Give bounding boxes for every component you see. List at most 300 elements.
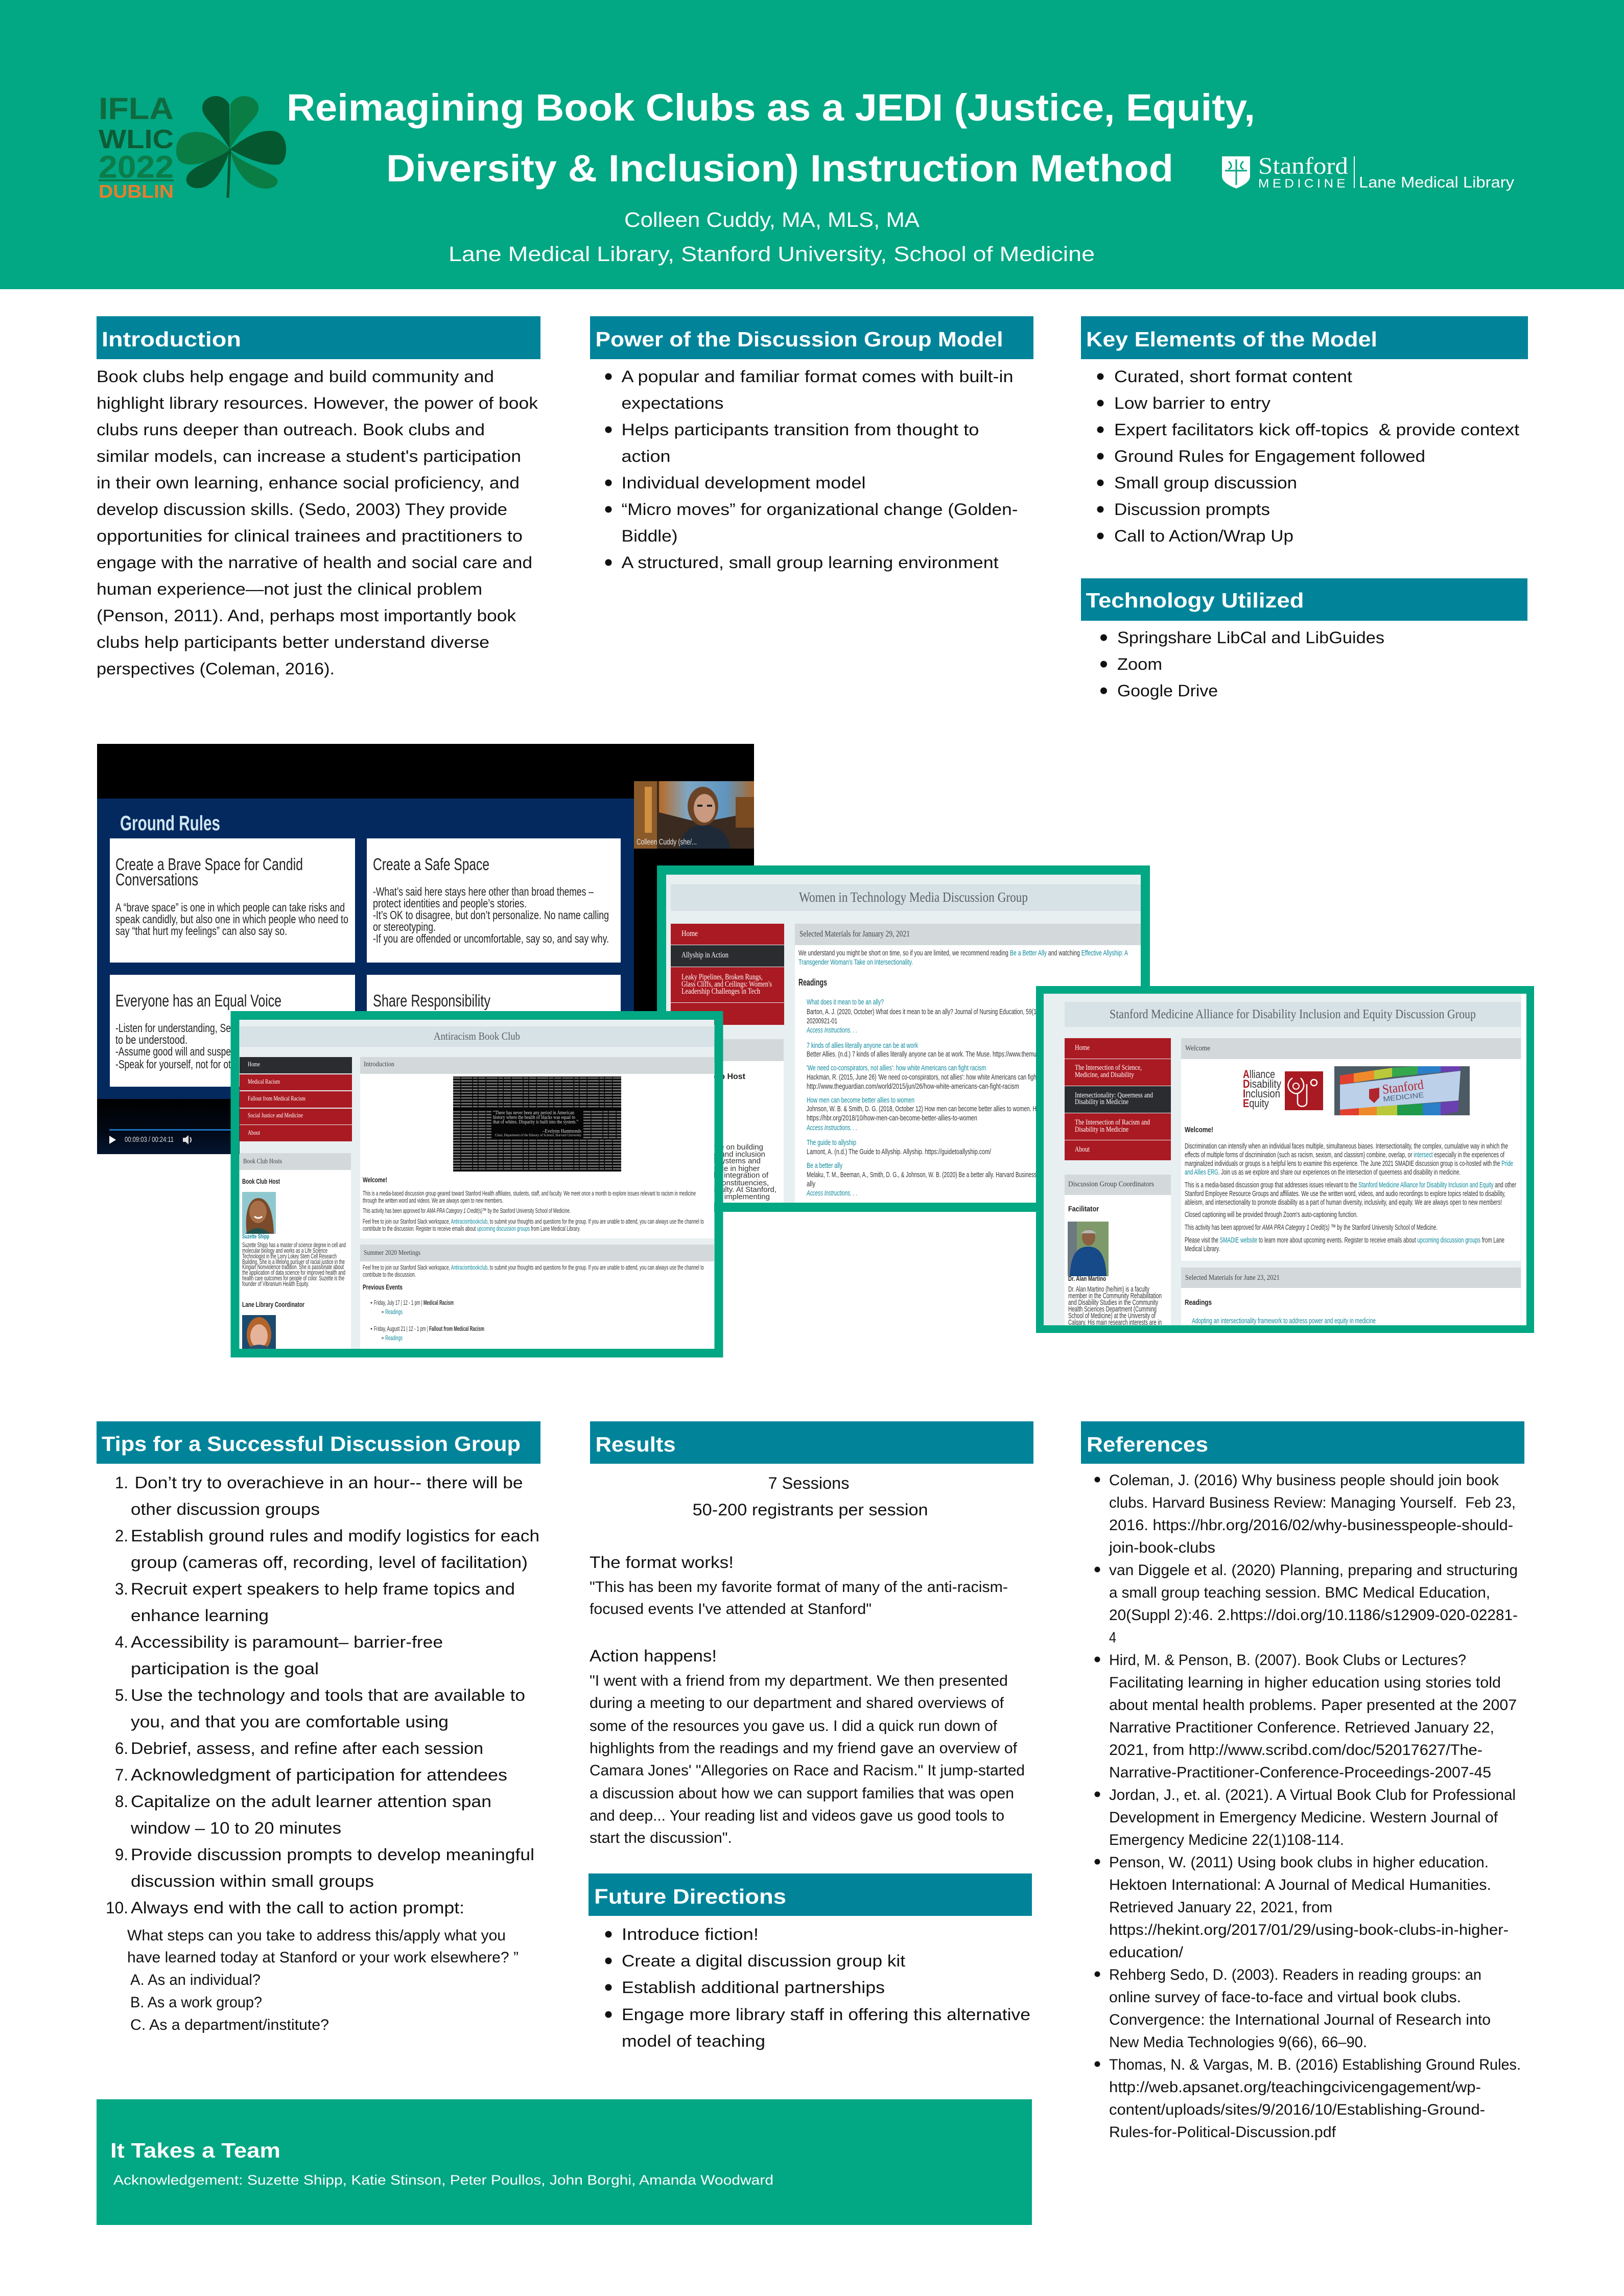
logo: IFLA WLIC 2022 Dublin: 2022: [99, 150, 174, 185]
heading: power of the discussion group model: Power of the Discussion Group Model: [596, 327, 1003, 351]
sidebar: discussion group coordinators: Dr. Alan Martino (he/him) is a faculty: [1068, 1285, 1149, 1294]
main content: introduction: Feel free to join our Stanford Slack workspace, Antiracismbookclub, to submit your thoughts and questions for the group. If you are unable to attend, you can always use the channel to: [363, 1217, 704, 1225]
logo: alliance disability inclusion equity: Disability: [1243, 1077, 1281, 1090]
heading: references: References: [1087, 1433, 1208, 1456]
sidebar: discussion group coordinators: Facilitator: [1068, 1205, 1099, 1213]
title: Reimagining Book Clubs as a JEDI (Justice, Equity,: [287, 86, 1255, 129]
main content: summer 2020 meetings: Summer 2020 Meetings: [364, 1249, 420, 1257]
card: share responsibility: Share Responsibility: [373, 991, 490, 1010]
panel: introduction: [97, 316, 540, 678]
main content: selected materials: We understand you might be short on time, so if you are limited, we recommend reading Be a Better Ally and watching Effective Allyship: A: [798, 949, 1128, 957]
list: references: Convergence: the International Journal of Research into: [1109, 2011, 1491, 2028]
list: future directions: Create a digital discussion group kit: [622, 1952, 905, 1970]
list: technology bullets: Google Drive: [1117, 682, 1218, 700]
list: references: about mental health problems. Paper presented at the 2007: [1109, 1697, 1517, 1714]
photo: speaker webcam: [634, 781, 754, 849]
panel: future directions: [589, 1873, 1032, 2050]
list: power bullets: Individual development model: [621, 474, 865, 492]
numbered list: tips: Acknowledgment of participation for attendees: [131, 1766, 507, 1784]
list: references: van Diggele et al. (2020) Planning, preparing and structuring: [1109, 1562, 1518, 1579]
main content: summer 2020 meetings: Previous Events: [363, 1283, 403, 1291]
main content: welcome: and Allies ERG. Join us as we explore and share our experiences on the intersection of queerness and disability in medicine.: [1185, 1168, 1461, 1177]
main content: selected materials: ally: [807, 1180, 815, 1188]
sidebar hosts: diversity, and inclusion: [689, 1150, 765, 1159]
list: key elements bullets: Expert facilitators kick off-topics & provide context: [1114, 420, 1519, 439]
panel: tips for a successful discussion group: [97, 1421, 540, 2033]
photo: stanford medicine pride banner: Stanford: [1381, 1077, 1424, 1097]
main content: welcome: This is a media-based discussion group that addresses issues relevant to the Stanford Medicine Alliance for Disability Inclusion and Equity and other: [1185, 1181, 1516, 1189]
numbered list: tips: 10.: [106, 1899, 128, 1917]
sidebar: discussion group coordinators: [1065, 1175, 1171, 1327]
main content: selected materials: Barton, A. J. (2020, October) What does it mean to be an ally? Journal of Nursing Education, 59(1: [807, 1008, 1037, 1016]
sidebar: discussion group coordinators: Discussion Group Coordinators: [1068, 1180, 1154, 1188]
sidebar: discussion group coordinators: School of Medicine) at the University of: [1068, 1311, 1156, 1320]
video controls: [109, 1129, 231, 1144]
list: future directions: Engage more library staff in offering this alternative: [622, 2005, 1030, 2024]
list: references: content/uploads/sites/9/2016/10/Establishing-Ground-: [1109, 2101, 1485, 2118]
card: brave space: Create a Brave Space for Candid: [115, 855, 303, 874]
card: equal voice: Everyone has an Equal Voice: [115, 991, 281, 1010]
title: Diversity & Inclusion) Instruction Method: [386, 147, 1173, 190]
sidebar navigation: About: [248, 1129, 260, 1136]
sidebar: book club hosts: Lane Library Coordinator: [242, 1300, 304, 1308]
list: references: http://web.apsanet.org/teachingcivicengagement/wp-: [1109, 2079, 1481, 2096]
main content: summer 2020 meetings: Readings: [385, 1308, 403, 1316]
list: references: Hektoen International: A Journal of Medical Humanities.: [1109, 1877, 1491, 1893]
quote: action happens: [590, 1647, 1025, 1846]
logo: Stanford Medicine Lane Medical Library: Lane Medical Library: [1359, 173, 1515, 191]
main content: selected materials: http://www.theguardian.com/world/2015/jun/26/how-white-americans-can-fight-racism: [807, 1082, 1019, 1091]
numbered list: tips: Accessibility is paramount– barrier-free: [131, 1633, 443, 1651]
main content: summer 2020 meetings: contribute to the discussion.: [363, 1271, 416, 1278]
list: references: 2016. https://hbr.org/2016/02/why-businesspeople-should-: [1109, 1517, 1513, 1534]
sidebar: book club hosts: molecular biology and works as a Life Science: [242, 1247, 327, 1254]
main content: selected materials: The guide to allyship: [807, 1138, 856, 1147]
quote: action happens: during a meeting to our department and shared overviews of: [590, 1695, 1004, 1712]
quote: action happens: highlights from the readings and my friend gave an overview of: [590, 1740, 1018, 1756]
list: references: a small group teaching session. BMC Medical Education,: [1109, 1584, 1490, 1601]
numbered list: tips: 9.: [115, 1845, 128, 1864]
page title: [1065, 1002, 1521, 1027]
list: key elements bullets: [1097, 367, 1519, 545]
sidebar: discussion group coordinators: Health Sciences Department (Cumming: [1068, 1305, 1157, 1314]
quote: the format works: The format works!: [590, 1553, 734, 1572]
authors: Lane Medical Library, Stanford University, School of Medicine: [449, 242, 1095, 266]
stat: sessions and registrants: 7 Sessions: [768, 1474, 849, 1492]
list: references: Coleman, J. (2016) Why business people should join book: [1109, 1472, 1499, 1489]
photo: Suzette Shipp: [242, 1192, 276, 1234]
text block: introduction body: clubs runs deeper than outreach. Book clubs and: [97, 420, 485, 439]
list: references: Narrative-Practitioner-Conference-Proceedings-2007-45: [1109, 1764, 1491, 1781]
card: brave space: [110, 838, 355, 963]
numbered list: tips: Don’t try to overachieve in an hour-- there will be: [135, 1473, 523, 1492]
numbered list: tips: 3.: [115, 1580, 128, 1598]
list: references: Hird, M. & Penson, B. (2007). Book Clubs or Lectures?: [1109, 1652, 1466, 1669]
main content: introduction: through the written word and videos. We are always open to new members.: [363, 1197, 503, 1204]
photo: stanford medicine pride banner: [1334, 1066, 1470, 1115]
quote: action happens: and deep... Your reading list and videos gave us good tools to: [590, 1808, 1004, 1824]
main content: selected materials: 7 kinds of allies literally anyone can be at work: [807, 1041, 918, 1050]
quote: action happens: start the discussion".: [590, 1830, 732, 1846]
card: brave space: A “brave space” is one in which people can take risks and: [115, 901, 345, 914]
main content: selected materials: Selected Materials for January 29, 2021: [799, 929, 910, 939]
sidebar hosts: with implementing: [708, 1192, 770, 1201]
logo: alliance disability inclusion equity: [1243, 1068, 1323, 1110]
text block: introduction body: (Penson, 2011). And, perhaps most importantly book: [97, 606, 516, 625]
sidebar navigation: Allyship in Action: [681, 951, 728, 959]
panel: power of the discussion group model: [590, 316, 1033, 572]
card: safe space: -If you are offended or uncomfortable, say so, and say why.: [373, 932, 609, 945]
heading: ground rules: Ground Rules: [120, 811, 220, 835]
list: references: Jordan, J., et. al. (2021). A Virtual Book Club for Professional: [1109, 1787, 1516, 1803]
stat: sessions and registrants: 50-200 registrants per session: [693, 1501, 928, 1519]
sidebar: discussion group coordinators: and Disability Studies in the Community: [1068, 1298, 1158, 1307]
sidebar: book club hosts: Building. She is a lifelong pursuer of racial justice in the: [242, 1258, 345, 1266]
main content: selected materials: 20200921-01: [807, 1017, 837, 1025]
text block: call to action prompt: [127, 1927, 519, 2033]
numbered list: tips: Always end with the call to action prompt:: [131, 1899, 464, 1917]
sidebar hosts: guidance on building: [693, 1143, 763, 1152]
main content: selected materials: 'We need co-conspirators, not allies': how white Americans can fight racism: [807, 1064, 986, 1072]
logo: Stanford Medicine Lane Medical Library: [1222, 153, 1515, 191]
heading: technology utilized: Technology Utilized: [1086, 589, 1304, 612]
sidebar: book club hosts: founder of Vibranium Health Equity.: [242, 1280, 309, 1287]
screenshot: stanford medicine alliance page: [1040, 990, 1531, 1329]
numbered list: tips: 7.: [115, 1766, 128, 1784]
list: references: 20(Suppl 2):46. 2.https://doi.org/10.1186/s12909-020-02281-: [1109, 1607, 1518, 1624]
page title: [240, 1026, 714, 1047]
list: technology bullets: [1100, 628, 1384, 700]
heading: tips: Tips for a Successful Discussion Group: [102, 1432, 521, 1456]
panel: technology utilized: [1081, 578, 1527, 700]
list: references: New Media Technologies 9(66), 66–90.: [1109, 2034, 1367, 2051]
list: key elements bullets: Call to Action/Wrap Up: [1114, 527, 1293, 545]
list: references: Narrative Practitioner Conference. Retrieved January 22,: [1109, 1719, 1494, 1736]
card: equal voice: to be understood.: [115, 1033, 187, 1046]
list: key elements bullets: Curated, short format content: [1114, 367, 1352, 386]
photo: Dr. Alan Martino: [1068, 1222, 1109, 1276]
heading: it takes a team: It Takes a Team: [110, 2139, 280, 2162]
numbered list: tips: 2.: [115, 1527, 128, 1545]
quote: the format works: "This has been my favorite format of many of the anti-racism-: [590, 1579, 1008, 1596]
sidebar: book club hosts: Suzette Shipp: [242, 1233, 269, 1240]
numbered list: tips: 8.: [115, 1792, 128, 1811]
title: [287, 86, 1255, 190]
list: references: clubs. Harvard Business Review: Managing Yourself. Feb 23,: [1109, 1494, 1516, 1511]
list: power bullets: “Micro moves” for organizational change (Golden-: [621, 500, 1018, 519]
screenshot: ground rules video: [97, 744, 754, 1154]
list: key elements bullets: Small group discussion: [1114, 474, 1297, 492]
numbered list: tips: [106, 1473, 539, 1917]
card: equal voice: -Listen for understanding, Se: [115, 1021, 231, 1035]
list: power bullets: Biddle): [621, 527, 677, 545]
text block: introduction body: engage with the narrative of health and social care and: [97, 553, 532, 572]
logo: Stanford Medicine Lane Medical Library: Stanford: [1258, 153, 1348, 179]
image: hammonds quote on names: that of whites. Disparity is built into the system.”: [493, 1119, 578, 1125]
sidebar navigation: [240, 1057, 352, 1141]
page title: Antiracism Book Club: [434, 1030, 520, 1042]
main content: selected materials june: Selected Materials for June 23, 2021: [1185, 1274, 1280, 1282]
sidebar: discussion group coordinators: member in the Community Rehabilitation: [1068, 1292, 1162, 1300]
sidebar navigation: Intersectionality: Queerness and: [1075, 1091, 1153, 1099]
sidebar hosts: Discussion Group Host: [654, 1072, 746, 1081]
sidebar: book club hosts: Book Club Hosts: [243, 1158, 282, 1165]
quote: the format works: focused events I've attended at Stanford": [590, 1601, 872, 1618]
main content: selected materials: Hackman, R. (2015, June 26) 'We need co-conspirators, not allies': how white Americans can figh: [807, 1073, 1037, 1082]
logo: alliance disability inclusion equity: Inclusion: [1243, 1087, 1280, 1100]
sidebar hosts: experience in higher: [691, 1164, 760, 1173]
main content: welcome: This activity has been approved for AMA PRA Category 1 Credit(s) ™ by the Stanford University School of Medicine.: [1185, 1223, 1438, 1232]
numbered list: tips: Capitalize on the adult learner attention span: [131, 1792, 491, 1811]
numbered list: tips: 4.: [115, 1633, 128, 1651]
logo: alliance disability inclusion equity: Alliance: [1243, 1068, 1275, 1081]
list: technology bullets: Zoom: [1117, 655, 1162, 673]
numbered list: tips: 6.: [115, 1739, 128, 1758]
list: references: Rehberg Sedo, D. (2003). Readers in reading groups: an: [1109, 1966, 1481, 1983]
card: equal voice: -Speak for yourself, not for ot: [115, 1058, 231, 1071]
logo: IFLA WLIC 2022 Dublin: [99, 91, 174, 202]
list: future directions: [605, 1925, 1030, 2050]
text block: introduction body: highlight library resources. However, the power of book: [97, 394, 538, 412]
image: hammonds quote on names: –Evelynn Hammonds: [542, 1129, 581, 1134]
image: hammonds quote on names: Chair, Department of the History of Science, Harvard University: [495, 1133, 581, 1137]
list: key elements bullets: Discussion prompts: [1114, 500, 1270, 519]
text block: introduction body: clubs help participants better understand diverse: [97, 633, 489, 651]
panel: it takes a team: [97, 2099, 1032, 2225]
main content: selected materials june: [1181, 1268, 1521, 1326]
heading: key elements: Key Elements of the Model: [1086, 327, 1377, 351]
list: references: Emergency Medicine 22(1)108-114.: [1109, 1832, 1344, 1848]
sidebar navigation: Social Justice and Medicine: [248, 1111, 303, 1119]
text block: call to action prompt: B. As a work group?: [130, 1994, 262, 2011]
sidebar: book club hosts: the application of data science for improved health and: [242, 1269, 345, 1276]
sidebar: book club hosts: health care outcomes for people of color. Suzette is the: [242, 1274, 344, 1282]
list: power bullets: expectations: [621, 394, 723, 412]
main content: selected materials: [795, 924, 1141, 1204]
text block: introduction body: similar models, can increase a student's participation: [97, 447, 521, 465]
main content: summer 2020 meetings: Friday, July 17 | 12 - 1 pm | Medical Racism: [374, 1299, 454, 1306]
authors: Colleen Cuddy, MA, MLS, MA: [624, 208, 920, 231]
numbered list: tips: Establish ground rules and modify logistics for each: [131, 1527, 539, 1545]
list: future directions: Establish additional partnerships: [622, 1978, 885, 1997]
main content: introduction: [360, 1057, 714, 1238]
heading: introduction: Introduction: [102, 327, 241, 351]
numbered list: tips: other discussion groups: [131, 1500, 320, 1518]
list: references: education/: [1109, 1944, 1184, 1961]
text block: call to action prompt: have learned today at Stanford or your work elsewhere? ”: [127, 1949, 519, 1966]
numbered list: tips: window – 10 to 20 minutes: [130, 1819, 341, 1837]
text block: introduction body: Book clubs help engage and build community and: [97, 367, 494, 386]
list: future directions: Introduce fiction!: [622, 1925, 759, 1943]
quote: action happens: a discussion about how we can support families that was open: [590, 1785, 1014, 1802]
main content: selected materials: Readings: [798, 977, 827, 988]
logo: IFLA WLIC 2022 Dublin: DUBLIN: [99, 181, 174, 202]
numbered list: tips: 5.: [115, 1686, 128, 1704]
main content: welcome: Closed captioning will be provided through Zoom's auto-captioning function.: [1185, 1210, 1358, 1219]
card: brave space: speak candidly, but also one in which people who need to: [115, 912, 348, 926]
list: references: Development in Emergency Medicine. Western Journal of: [1109, 1809, 1498, 1826]
list: future directions: model of teaching: [622, 2032, 765, 2050]
photo: stanford medicine pride banner: MEDICINE: [1383, 1091, 1424, 1103]
photo: speaker webcam: Colleen Cuddy (she/...: [637, 838, 697, 847]
image: hammonds quote on names: [453, 1076, 621, 1172]
sidebar: book club hosts: Book Club Host: [242, 1177, 280, 1185]
main content: introduction: Introduction: [364, 1061, 394, 1068]
logo: IFLA WLIC 2022 Dublin: IFLA: [99, 91, 174, 126]
main content: introduction: contribute to the discussion. Register to receive emails about upcoming discussion groups from Lane Medical Library.: [363, 1225, 580, 1232]
list: power bullets: A structured, small group learning environment: [621, 553, 998, 572]
quote: action happens: "I went with a friend from my department. We then presented: [590, 1673, 1008, 1689]
main content: welcome: [1181, 1038, 1521, 1261]
page title: Women in Technology Media Discussion Group: [799, 889, 1028, 905]
list: power bullets: A popular and familiar format comes with built-in: [621, 367, 1014, 386]
card: safe space: -What’s said here stays here other than broad themes –: [373, 885, 594, 898]
main content: welcome: Welcome!: [1185, 1126, 1213, 1134]
sidebar navigation: The Intersection of Racism and: [1075, 1118, 1150, 1127]
list: references: Facilitating learning in higher education using stories told: [1109, 1674, 1501, 1691]
numbered list: tips: Recruit expert speakers to help frame topics and: [131, 1580, 515, 1598]
list: power bullets: action: [621, 447, 670, 465]
sidebar hosts: in the integration of: [703, 1171, 769, 1180]
numbered list: tips: you, and that you are comfortable using: [131, 1713, 449, 1731]
sidebar hosts: across all constituencies,: [684, 1179, 769, 1187]
video controls: 00:09:03 / 00:24:11: [125, 1135, 174, 1144]
sidebar navigation: [671, 924, 784, 1025]
text block: call to action prompt: What steps can you take to address this/apply what you: [127, 1927, 506, 1944]
main content: introduction: Welcome!: [363, 1176, 387, 1184]
sidebar navigation: Home: [681, 929, 698, 938]
sidebar hosts: [654, 1039, 784, 1204]
panel: references: [1081, 1421, 1524, 2141]
sidebar: book club hosts: [240, 1153, 351, 1352]
sidebar navigation: Glass Cliffs, and Ceilings: Women's: [681, 980, 772, 989]
main content: selected materials: Access Instructions. . .: [806, 1189, 857, 1198]
logo: IFLA WLIC 2022 Dublin: WLIC: [99, 125, 174, 154]
main content: selected materials: What does it mean to be an ally?: [807, 998, 884, 1006]
main content: welcome: Please visit the SMADIE website to learn more about upcoming events. Register to receive emails about upcoming discussion groups from Lane: [1185, 1236, 1504, 1245]
list: references: 4: [1109, 1629, 1116, 1646]
list: key elements bullets: Low barrier to entry: [1114, 394, 1271, 412]
numbered list: tips: enhance learning: [131, 1606, 269, 1625]
numbered list: tips: group (cameras off, recording, level of facilitation): [131, 1553, 528, 1572]
main content: welcome: effects of multiple forms of discrimination (such as racism, sexism, and classism) combine, overlap, or intersect especially in the experiences of: [1185, 1151, 1505, 1159]
panel: key elements of the model: [1081, 316, 1528, 545]
list: references: https://hekint.org/2017/01/29/using-book-clubs-in-higher-: [1109, 1922, 1509, 1938]
card: equal voice: -Assume good will and suspe: [115, 1045, 231, 1058]
main content: introduction: This is a media-based discussion group geared toward Stanford Health affiliates, students, staff, and faculty. We meet once a month to explore issues relevant to racism in medicine: [363, 1189, 696, 1197]
image: hammonds quote on names: “There has never been any period in American: [493, 1110, 574, 1116]
text block: introduction body: develop discussion skills. (Sedo, 2003) They provide: [97, 500, 507, 519]
text block: acknowledgement: Acknowledgement: Suzette Shipp, Katie Stinson, Peter Poullos, John Borghi, Amanda Woodward: [113, 2172, 773, 2188]
page title: [671, 884, 1141, 911]
sidebar navigation: [1065, 1038, 1171, 1160]
card: brave space: Conversations: [115, 870, 198, 889]
card: safe space: protect identities and people’s stories.: [373, 897, 527, 910]
main content: selected materials: Johnson, W. B. & Smith, D. G. (2018, October 12) How men can become better allies to women. H: [807, 1105, 1037, 1113]
list: power bullets: [605, 367, 1018, 572]
main content: selected materials: Transgender Woman's Take on Intersectionality.: [798, 958, 913, 967]
sidebar navigation: Leaky Pipelines, Broken Rungs,: [681, 973, 763, 981]
quote: action happens: some of the resources you gave us. I did a quick run down of: [590, 1718, 998, 1735]
text block: call to action prompt: A. As an individual?: [130, 1972, 261, 1988]
sidebar navigation: Disability in Medicine: [1075, 1126, 1128, 1134]
logo: Stanford Medicine Lane Medical Library: MEDICINE: [1258, 177, 1349, 191]
main content: selected materials: Access Instructions. . .: [806, 1026, 857, 1035]
authors: [449, 208, 1095, 266]
card: safe space: Create a Safe Space: [373, 855, 489, 874]
text block: introduction body: in their own learning, enhance social proficiency, and: [97, 474, 520, 492]
numbered list: tips: participation is the goal: [131, 1659, 319, 1678]
list: power bullets: Helps participants transition from thought to: [621, 420, 979, 439]
screenshot: women in technology page: [654, 870, 1145, 1207]
quote: action happens: Camara Jones' "Allegories on Race and Racism." It jump-started: [590, 1762, 1025, 1779]
sidebar navigation: About: [1075, 1145, 1090, 1154]
sidebar navigation: Fallout from Medical Racism: [248, 1094, 305, 1102]
list: references: online survey of face-to-face and virtual book clubs.: [1109, 1989, 1461, 2006]
main content: selected materials june: Readings: [1185, 1298, 1212, 1307]
main content: selected materials: Be a better ally: [807, 1161, 842, 1170]
sidebar: discussion group coordinators: Calgary. His main research interests are in: [1068, 1318, 1162, 1327]
main content: selected materials: Lamont, A. (n.d.) The Guide to Allyship. Allyship. https://guidetoallyship.com/: [807, 1147, 992, 1156]
stat: sessions and registrants: [693, 1474, 928, 1519]
list: key elements bullets: Ground Rules for Engagement followed: [1114, 447, 1425, 465]
list: references: join-book-clubs: [1109, 1539, 1215, 1556]
text block: introduction body: human experience—not just the clinical problem: [97, 580, 482, 598]
quote: action happens: Action happens!: [590, 1647, 717, 1665]
logo: alliance disability inclusion equity: Equity: [1243, 1097, 1269, 1110]
list: references: Thomas, N. & Vargas, M. B. (2016) Establishing Ground Rules.: [1109, 2056, 1521, 2073]
card: equal voice: [110, 975, 355, 1087]
list: technology bullets: Springshare LibCal and LibGuides: [1117, 628, 1384, 647]
sidebar: book club hosts: Suzette Shipp has a master of science degree in cell and: [242, 1241, 346, 1249]
card: safe space: [367, 838, 621, 963]
main content: introduction: This activity has been approved for AMA PRA Category 1 Credit(s)™ by the Stanford University School of Medicine.: [363, 1207, 571, 1214]
card: brave space: say “that hurt my feelings” can also say so.: [115, 924, 287, 938]
sidebar: book club hosts: Kingian Nonviolence tradition. She is passionate about: [242, 1263, 344, 1271]
list: references: Retrieved January 22, 2021, from: [1109, 1899, 1332, 1916]
list: references: Rules-for-Political-Discussion.pdf: [1109, 2124, 1336, 2141]
sidebar navigation: Medical Racism: [248, 1077, 280, 1085]
header banner: [0, 0, 1624, 289]
main content: selected materials: https://hbr.org/2018/10/how-men-can-become-better-allies-to-women: [807, 1114, 977, 1122]
heading: results: Results: [596, 1433, 675, 1456]
sidebar: discussion group coordinators: Dr. Alan Martino: [1068, 1275, 1106, 1282]
text block: call to action prompt: C. As a department/institute?: [130, 2017, 329, 2033]
sidebar navigation: Home: [248, 1060, 260, 1068]
list: references: [1094, 1472, 1521, 2141]
main content: summer 2020 meetings: Friday, August 21 | 12 - 1 pm | Fallout from Medical Racism: [374, 1325, 484, 1332]
page title: Stanford Medicine Alliance for Disability Inclusion and Equity Discussion Group: [1110, 1008, 1476, 1021]
sidebar navigation: Disability in Medicine: [1075, 1098, 1128, 1106]
main content: welcome: Medical Library.: [1185, 1245, 1220, 1253]
main content: selected materials june: Adopting an intersectionality framework to address power and equity in medicine: [1192, 1317, 1376, 1325]
text block: introduction body: perspectives (Coleman, 2016).: [97, 660, 335, 678]
main content: summer 2020 meetings: Feel free to join our Stanford Slack workspace, Antiracismbookclub, to submit your thoughts and questions for the group. If you are unable to attend, you can always use the channel to: [363, 1263, 704, 1271]
main content: summer 2020 meetings: [360, 1245, 714, 1349]
panel: results: [590, 1421, 1033, 1846]
numbered list: tips: Provide discussion prompts to develop meaningful: [131, 1845, 534, 1864]
quote: the format works: [590, 1553, 1008, 1618]
main content: summer 2020 meetings: Readings: [385, 1334, 403, 1342]
main content: selected materials: Better Allies. (n.d.) 7 kinds of allies literally anyone can be at work. The Muse. https://www.themu: [807, 1050, 1037, 1059]
sidebar navigation: Leadership Challenges in Tech: [681, 987, 760, 996]
main content: selected materials: How men can become better allies to women: [807, 1096, 914, 1105]
sidebar: book club hosts: Technologist in the Lorry Lokey Stem Cell Research: [242, 1252, 337, 1260]
screenshot: antiracism book club page: [235, 1016, 719, 1353]
sidebar navigation: Home: [1075, 1044, 1090, 1052]
list: references: Penson, W. (2011) Using book clubs in higher education.: [1109, 1854, 1489, 1871]
numbered list: tips: 1.: [115, 1473, 128, 1492]
